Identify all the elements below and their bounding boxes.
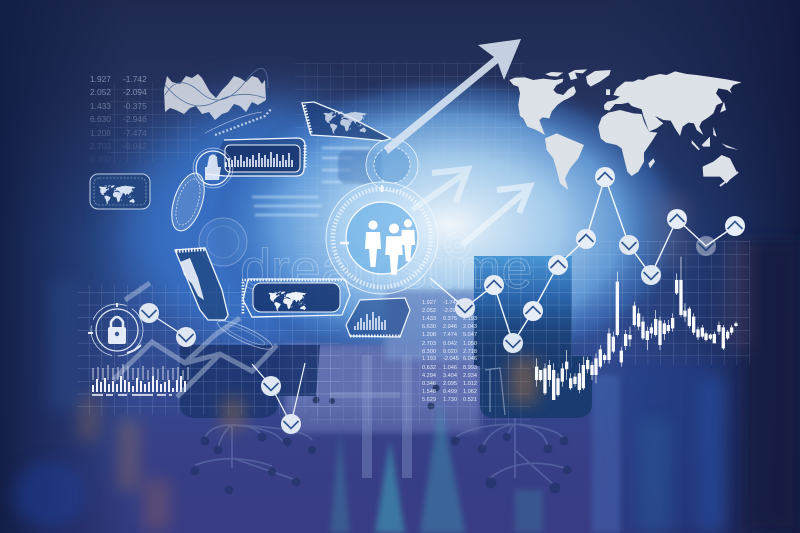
number table: centre: 5.047 <box>463 332 477 338</box>
number table: top left <box>90 74 147 164</box>
number table: centre: 1.208 <box>422 332 436 338</box>
number table: top left: -7.474 <box>123 128 147 138</box>
number table: centre: 2.718 <box>463 349 477 355</box>
number table: top left: -0.375 <box>123 101 147 111</box>
waveform bar chart: top left <box>164 68 268 120</box>
number table: centre: -1.742 <box>443 300 459 306</box>
number table: centre: 1.927 <box>422 300 436 306</box>
number table: centre: 2.703 <box>422 341 436 347</box>
number table: top left: 6.630 <box>90 114 111 124</box>
number table: centre: 1.062 <box>463 389 477 395</box>
number table: centre: -2.094 <box>443 308 459 314</box>
sphere: bottom map panel <box>242 279 350 317</box>
sphere: top panel <box>302 102 390 141</box>
number table: centre <box>422 300 477 403</box>
number table: top left: -1.742 <box>123 74 147 84</box>
number table: centre: 3.404 <box>443 373 457 379</box>
middle growth arrow <box>412 169 468 210</box>
people circle icon <box>326 182 438 294</box>
number table: centre: 1.433 <box>422 316 436 322</box>
number table: top left: -2.946 <box>123 114 147 124</box>
background: chairs and desk <box>180 256 592 494</box>
background: blurred streaks and lights <box>14 195 800 533</box>
number table: top left: 1.927 <box>90 74 111 84</box>
number table: centre: 6.630 <box>422 324 436 330</box>
number table: centre: 4.294 <box>422 373 436 379</box>
number table: centre: 0.020 <box>443 349 457 355</box>
number table: centre: 0.632 <box>422 365 436 371</box>
world map <box>509 69 742 190</box>
sphere: faded disc <box>199 218 247 266</box>
small map panel <box>90 174 150 209</box>
number table: centre: 0.521 <box>463 397 477 403</box>
number table: centre: 0.375 <box>443 316 457 322</box>
big growth arrow <box>384 39 521 154</box>
number table: centre: 1.730 <box>443 397 457 403</box>
candlestick chart <box>535 257 738 400</box>
growth arrow line: bottom left <box>113 283 277 397</box>
sphere: lock and bar chart panel <box>193 108 305 188</box>
zigzag chart: upper line <box>430 167 745 353</box>
number table: top left: 1.433 <box>90 101 111 111</box>
number table: centre: 2.193 <box>463 316 477 322</box>
number table: centre: -2.045 <box>443 356 459 362</box>
watermark: dreamstime <box>240 237 533 300</box>
number table: top left: 2.703 <box>90 141 111 151</box>
number table: centre: 1.193 <box>422 356 436 362</box>
number table: top left: -2.094 <box>123 87 147 97</box>
number table: top left: 2.052 <box>90 87 111 97</box>
sphere: lower right panel <box>346 298 410 337</box>
number table: centre: 1.046 <box>443 365 457 371</box>
number table: centre: 0.499 <box>443 389 457 395</box>
sphere of hologram panels <box>165 102 418 354</box>
number table: centre: 2.095 <box>443 381 457 387</box>
number table: centre: 8.300 <box>422 349 436 355</box>
number table: centre: 1.548 <box>422 389 436 395</box>
number table: centre: 7.474 <box>443 332 457 338</box>
number table: centre: 1.012 <box>463 381 477 387</box>
number table: centre: 2.052 <box>422 308 436 314</box>
number table: top left: -0.042 <box>123 141 147 151</box>
background: hologram grids <box>78 62 750 425</box>
number table: top left: 8.300 <box>90 154 111 164</box>
number table: centre: 2.946 <box>443 324 457 330</box>
sphere: top right disc <box>366 139 418 191</box>
number table: centre: 1.050 <box>463 341 477 347</box>
number table: centre: 0.346 <box>422 381 436 387</box>
number table: centre: 0.042 <box>443 341 457 347</box>
number table: centre: 2.043 <box>463 324 477 330</box>
sphere: small curve under globe <box>215 316 275 354</box>
number table: top left: 1.208 <box>90 128 111 138</box>
right growth arrow <box>462 186 530 245</box>
number table: centre: 8.993 <box>463 365 477 371</box>
sphere: blurred centre panels <box>252 148 382 215</box>
number table: centre: 2.934 <box>463 373 477 379</box>
small bar chart: bottom left <box>92 364 188 395</box>
sphere: left disc <box>165 169 211 235</box>
sphere: lower left panel <box>175 248 228 320</box>
lock icon with ring <box>88 303 143 356</box>
number table: centre: 6.046 <box>463 356 477 362</box>
zigzag chart: lower line <box>139 303 305 434</box>
number table: centre: 5.629 <box>422 397 436 403</box>
